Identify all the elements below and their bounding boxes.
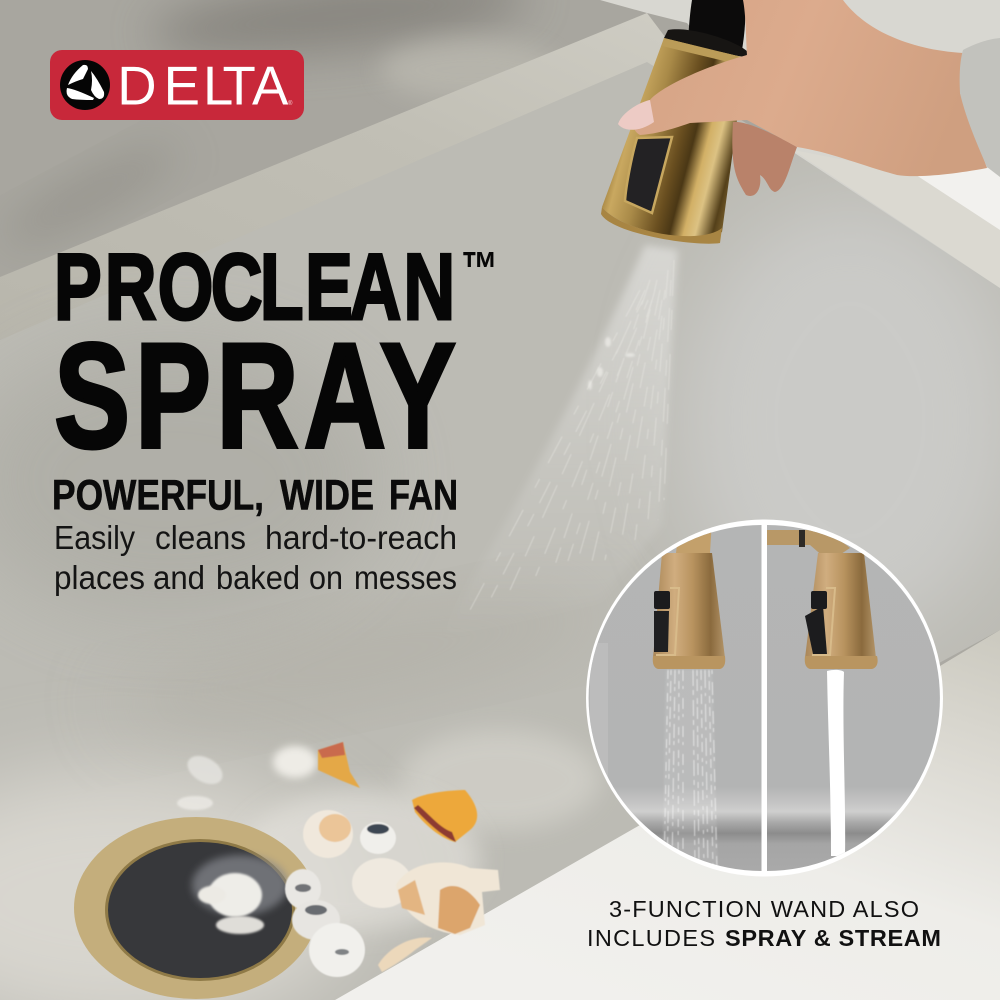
spray streams — [664, 823, 716, 862]
caption: 3-FUNCTION WAND ALSO — [609, 896, 919, 922]
caption — [587, 896, 941, 951]
left panel: spray mode — [588, 525, 762, 871]
faucet head — [805, 553, 876, 658]
fingers — [732, 122, 797, 196]
black button — [625, 137, 672, 213]
water stream — [827, 670, 845, 856]
gold spray head — [602, 38, 746, 238]
icon: delta triangle logo — [67, 65, 104, 100]
subheading: WIDE — [280, 472, 374, 520]
right rim — [860, 194, 1000, 288]
rim band — [0, 13, 690, 340]
comparison lens — [580, 520, 945, 880]
faucet head — [653, 553, 725, 658]
description: and — [153, 559, 205, 596]
droplets highlight — [588, 337, 635, 390]
headline: proclean: PROCLEAN — [54, 233, 455, 339]
upper right counter — [600, 0, 1000, 300]
hand — [634, 0, 987, 176]
logo badge: ® — [288, 100, 293, 107]
headline: proclean: ™ — [461, 243, 498, 296]
description: baked — [216, 559, 300, 596]
deck shadows — [147, 0, 533, 70]
description: Easily — [54, 519, 135, 556]
black buttons — [811, 591, 827, 609]
logo badge — [50, 50, 304, 120]
description: messes — [354, 559, 457, 596]
headline: spray: SPRAY — [54, 313, 456, 480]
drain and food debris — [74, 742, 500, 999]
subheading — [52, 472, 458, 520]
caption: SPRAY & STREAM — [725, 925, 941, 951]
description: on — [309, 559, 343, 596]
subheading: POWERFUL, — [52, 472, 264, 520]
wordmark: DELTA — [117, 56, 289, 116]
description: cleans — [155, 519, 246, 556]
spray fan — [440, 245, 678, 640]
right panel: stream mode — [765, 520, 945, 880]
black buttons — [654, 591, 670, 609]
caption: INCLUDES — [587, 925, 715, 951]
thumb nail — [618, 100, 654, 130]
countertop corner — [335, 630, 1000, 1000]
spout arm — [767, 530, 850, 553]
residue near drain — [183, 750, 227, 790]
black wand hose — [688, 0, 745, 50]
description: hard-to-reach — [265, 519, 457, 556]
milky residue — [240, 790, 480, 930]
food pieces — [285, 742, 500, 977]
subheading: FAN — [389, 472, 458, 520]
spout neck — [676, 532, 712, 553]
drain flange — [74, 817, 318, 999]
sweater cuff — [960, 38, 1000, 177]
description: places — [54, 559, 145, 596]
spray head in hand — [601, 0, 1000, 244]
description — [54, 519, 457, 596]
